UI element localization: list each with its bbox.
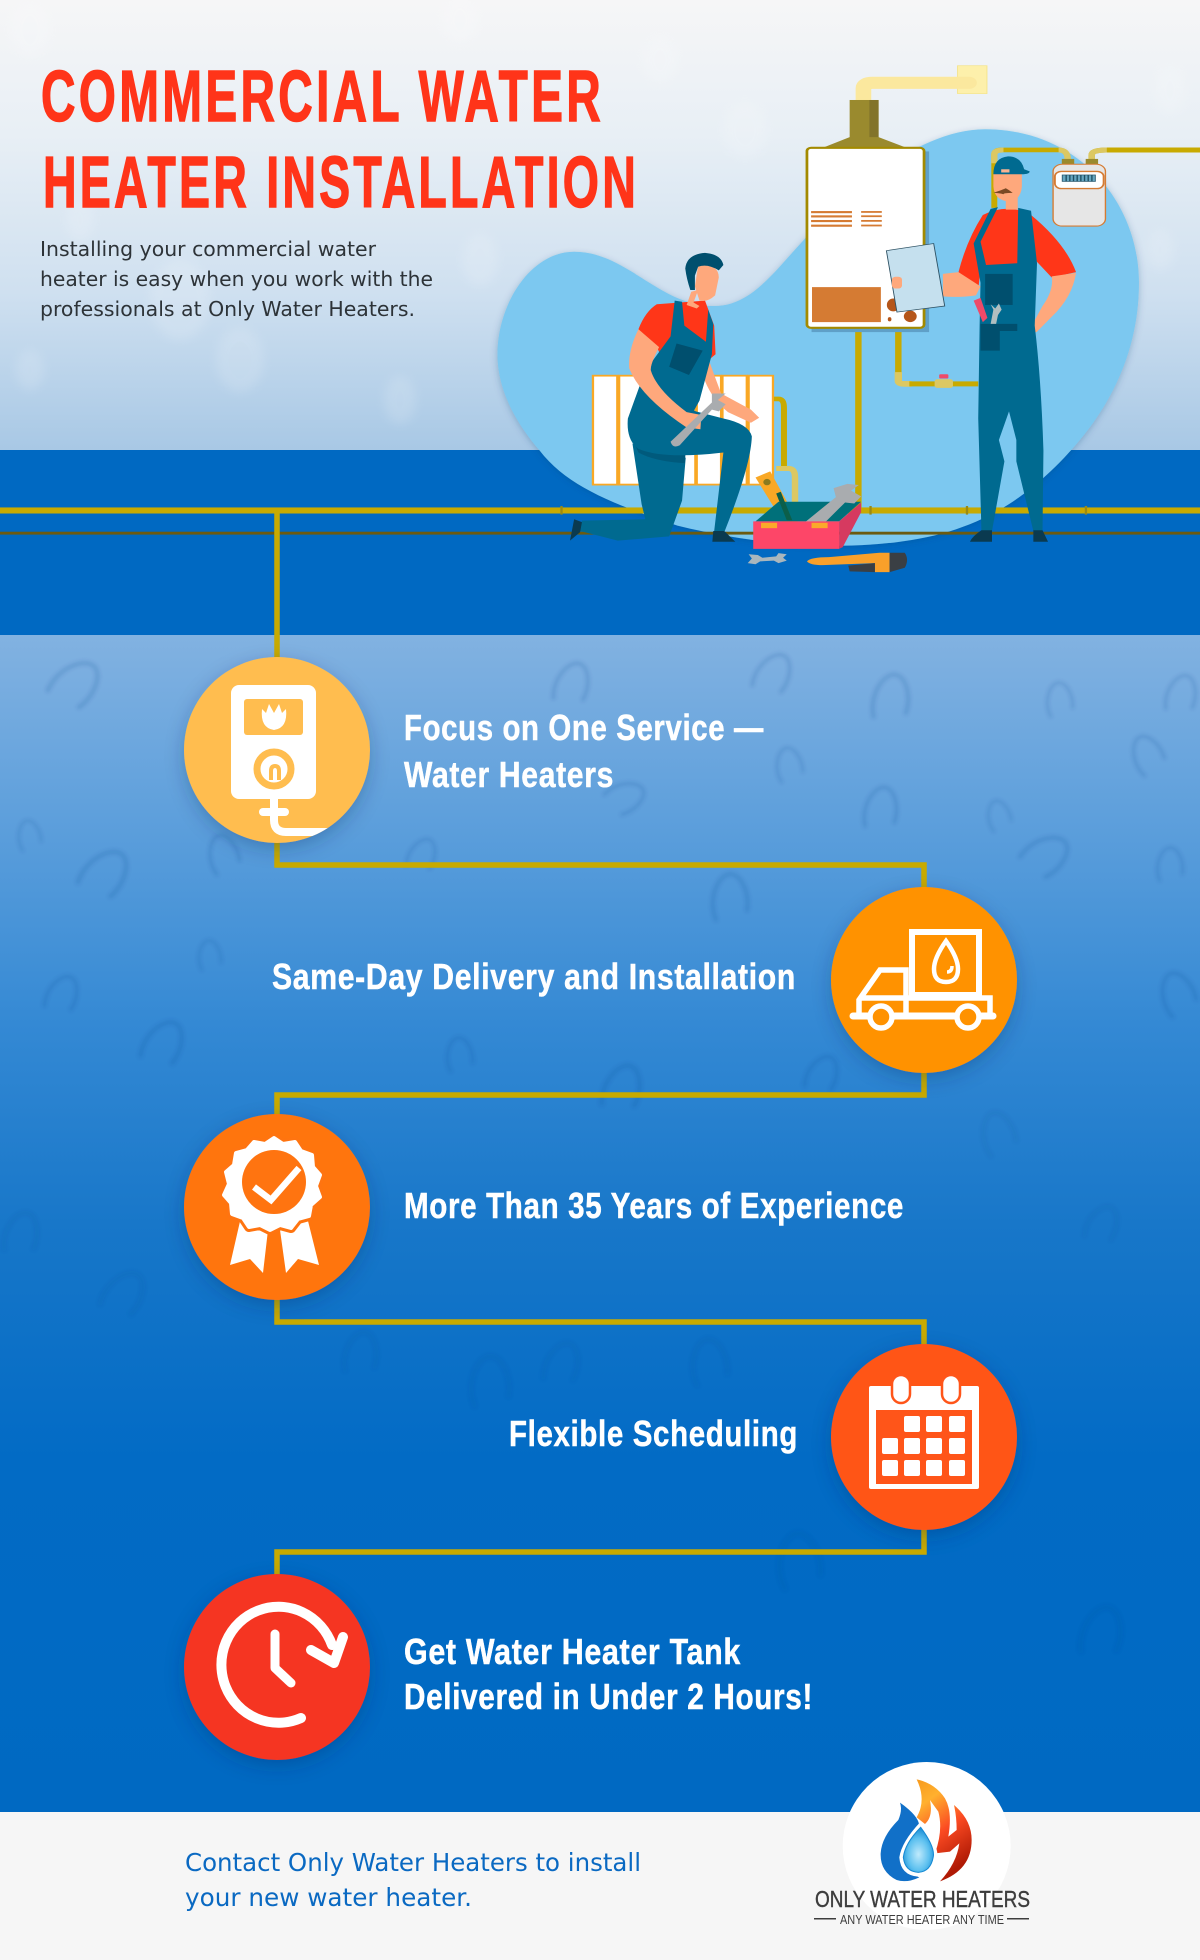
step 2 circle and truck icon — [831, 887, 1017, 1073]
step 1 text: Water Heaters — [404, 754, 614, 795]
illustration: plumbers installing a water heater — [0, 66, 1200, 572]
intro text: Installing your commercial water — [40, 237, 377, 261]
footer call to action — [185, 1848, 641, 1912]
step 1 text: Focus on One Service — — [404, 707, 764, 748]
step 5 text: Get Water Heater Tank — [404, 1631, 741, 1672]
step 4 text: Flexible Scheduling — [509, 1413, 798, 1454]
droplet gradient section — [0, 635, 1200, 1812]
step 3 circle and ribbon icon — [184, 1114, 370, 1300]
water heater unit — [807, 148, 929, 332]
header background — [0, 0, 1200, 450]
step 5 text — [404, 1631, 813, 1717]
connector pipe — [277, 510, 924, 1667]
step 4 circle and calendar icon — [831, 1344, 1017, 1530]
blue blob backdrop — [497, 129, 1139, 546]
kneeling plumber — [570, 253, 759, 542]
title — [41, 57, 639, 223]
intro text: heater is easy when you work with the — [40, 267, 433, 291]
footer band — [0, 1812, 1200, 1960]
logo: ONLY WATER HEATERS — [815, 1886, 1030, 1912]
blue band — [0, 450, 1200, 635]
intro text: professionals at Only Water Heaters. — [40, 297, 415, 321]
step 1 circle and heater icon — [184, 657, 370, 843]
footer call to action: Contact Only Water Heaters to install — [185, 1848, 641, 1877]
gas meter — [1053, 164, 1105, 226]
intro text — [40, 237, 433, 321]
step 1 text — [404, 707, 764, 795]
step 3 text: More Than 35 Years of Experience — [404, 1185, 904, 1226]
standing plumber — [886, 156, 1076, 542]
step 5 circle and clock icon — [184, 1574, 370, 1760]
toolbox and tools — [748, 471, 907, 572]
title: HEATER INSTALLATION — [43, 143, 639, 223]
footer call to action: your new water heater. — [185, 1883, 472, 1912]
step 5 text: Delivered in Under 2 Hours! — [404, 1676, 813, 1717]
exhaust vent — [824, 66, 987, 147]
logo — [814, 1762, 1030, 1930]
radiator — [593, 376, 773, 485]
floor pipes — [0, 506, 1200, 535]
step 2 text: Same-Day Delivery and Installation — [272, 956, 796, 997]
pipes — [774, 150, 1200, 510]
logo: ANY WATER HEATER ANY TIME — [840, 1912, 1004, 1927]
title: COMMERCIAL WATER — [41, 57, 604, 137]
